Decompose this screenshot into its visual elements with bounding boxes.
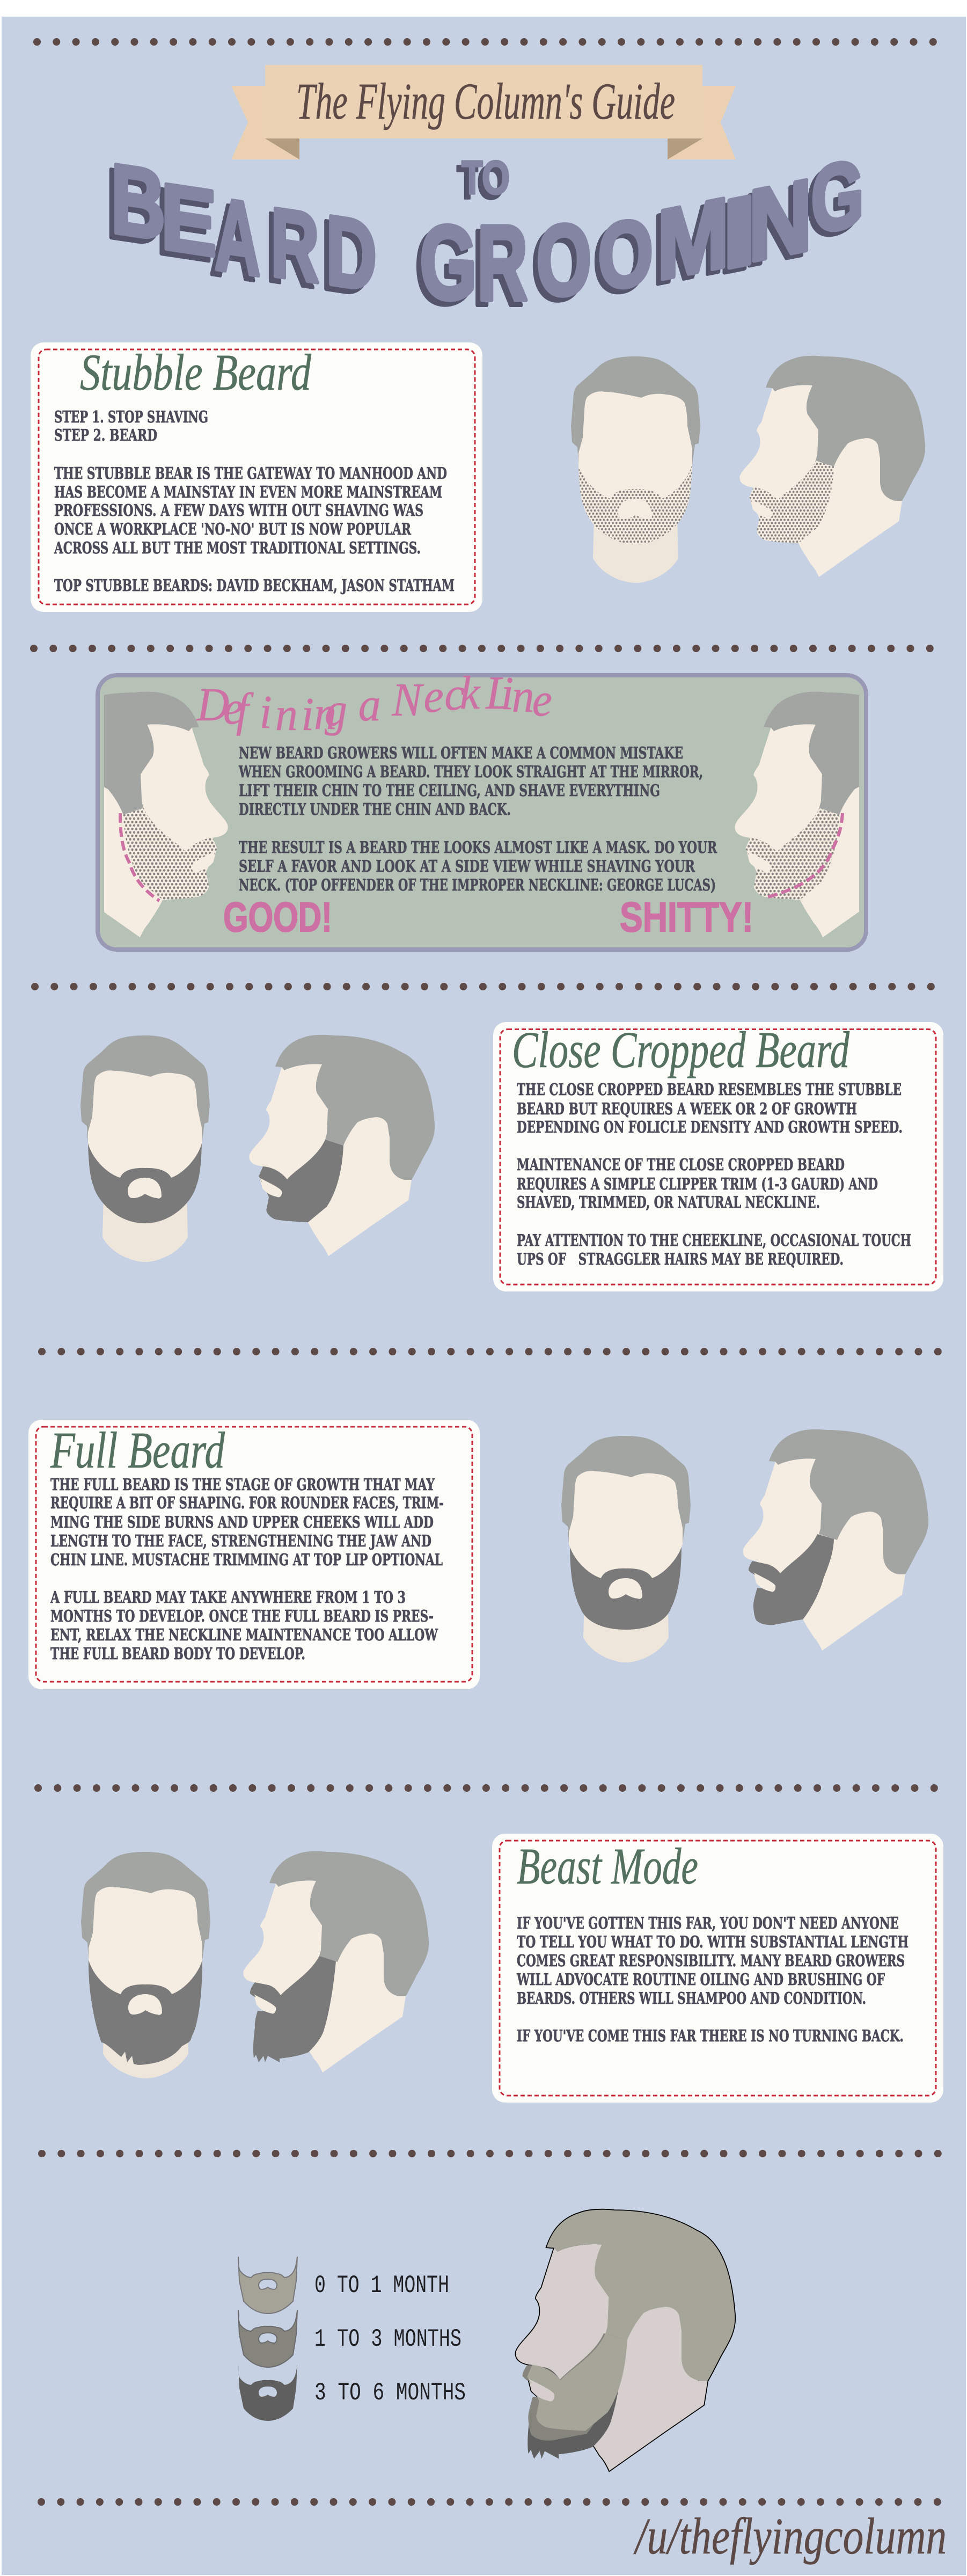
main title: to beard grooming: R — [477, 203, 528, 323]
main title: to beard grooming: T — [461, 152, 483, 204]
icon: beard 0 to 1 month — [238, 2257, 297, 2314]
body text: stubble beard: STEP 1. STOP SHAVING — [54, 408, 208, 427]
heading: stubble beard: Stubble Beard — [80, 344, 312, 401]
body text: neckline: THE RESULT IS A BEARD THE LOOKS ALMOST LIKE A MASK. DO YOUR — [239, 838, 717, 857]
main title: to beard grooming: B — [111, 143, 166, 261]
body text: close cropped beard: MAINTENANCE OF THE CLOSE CROPPED BEARD — [517, 1156, 845, 1174]
heading: defining a neckline: Defining a NeckLine — [196, 667, 552, 740]
illustration: close cropped beard front view — [80, 1035, 210, 1262]
main title: to beard grooming: A — [215, 176, 260, 298]
body text: full beard: MONTHS TO DEVELOP. ONCE THE FULL BEARD IS PRES- — [50, 1607, 434, 1626]
body text: full beard: LENGTH TO THE FACE, STRENGTHENING THE JAW AND — [50, 1532, 431, 1551]
body text: neckline: NEW BEARD GROWERS WILL OFTEN MAKE A COMMON MISTAKE — [239, 744, 683, 763]
body text: stubble beard: ACROSS ALL BUT THE MOST TRADITIONAL SETTINGS. — [54, 539, 421, 558]
dashed guide: bad neckline — [768, 813, 843, 897]
body text: stubble beard: STEP 2. BEARD — [54, 426, 157, 445]
body text: neckline: WHEN GROOMING A BEARD. THEY LOOK STRAIGHT AT THE MIRROR, — [238, 763, 703, 782]
body text: neckline: NECK. (TOP OFFENDER OF THE IMPROPER NECKLINE: GEORGE LUCAS) — [239, 876, 716, 895]
main title: to beard grooming: O — [482, 151, 510, 204]
legend label: 1 to 3 months: 1 TO 3 MONTHS — [314, 2325, 461, 2353]
label: shitty: SHITTY! — [620, 893, 753, 940]
main title: to beard grooming — [111, 140, 865, 323]
right profile: bad neckline — [735, 691, 859, 937]
illustration: stubble beard front view — [571, 356, 700, 583]
body text: stubble beard: THE STUBBLE BEAR IS THE GATEWAY TO MANHOOD AND — [54, 464, 447, 483]
main title: to beard grooming: N — [748, 157, 812, 284]
panel: close cropped beard — [493, 1021, 943, 1291]
panel: full beard — [28, 1420, 480, 1689]
body text: neckline: SELF A FAVOR AND LOOK AT A SIDE VIEW WHILE SHAVING YOUR — [239, 857, 695, 876]
left profile: good neckline — [104, 691, 228, 937]
icon: beard 3 to 6 months — [238, 2364, 297, 2421]
main title: to beard grooming: O — [536, 203, 591, 317]
label: good: GOOD! — [223, 893, 332, 940]
body text: neckline — [238, 744, 717, 895]
body text: neckline: DIRECTLY UNDER THE CHIN AND BACK. — [239, 800, 511, 819]
body text: close cropped beard: UPS OF STRAGGLER HAIRS MAY BE REQUIRED. — [517, 1250, 844, 1269]
body text: close cropped beard: SHAVED, TRIMMED, OR NATURAL NECKLINE. — [517, 1193, 820, 1212]
main title: to beard grooming: I — [721, 173, 758, 290]
legend: beard growth timeline — [238, 2257, 466, 2421]
body text: full beard: REQUIRE A BIT OF SHAPING. FOR ROUNDER FACES, TRIM- — [50, 1494, 444, 1513]
body text: stubble beard — [54, 408, 455, 595]
dashed guide: good neckline — [120, 813, 159, 901]
illustration: full beard front view — [561, 1436, 691, 1662]
legend label: 3 to 6 months: 3 TO 6 MONTHS — [314, 2379, 466, 2407]
heading: close cropped beard: Close Cropped Beard — [512, 1021, 850, 1078]
main title: to beard grooming: G — [811, 140, 865, 253]
illustration: stubble beard side view — [739, 356, 925, 577]
main title: to beard grooming: M — [657, 176, 729, 302]
body text: close cropped beard — [517, 1081, 911, 1269]
heading: beast mode: Beast Mode — [517, 1837, 698, 1895]
heading: full beard: Full Beard — [50, 1421, 225, 1479]
main title: to beard grooming: O — [598, 199, 653, 309]
body text: stubble beard: PROFESSIONS. A FEW DAYS WITH OUT SHAVING WAS — [54, 501, 423, 520]
body text: beast mode — [516, 1914, 909, 2046]
body text: stubble beard: TOP STUBBLE BEARDS: DAVID BECKHAM, JASON STATHAM — [54, 577, 455, 595]
illustration: beast mode side view — [243, 1851, 429, 2073]
panel: stubble beard — [31, 342, 482, 612]
panel: beast mode — [492, 1834, 943, 2103]
body text: full beard: THE FULL BEARD IS THE STAGE OF GROWTH THAT MAY — [50, 1476, 435, 1494]
ribbon banner with title line — [231, 65, 736, 159]
illustration: full beard side view — [743, 1429, 928, 1651]
body text: full beard — [50, 1476, 444, 1663]
main title: to beard grooming: G — [420, 202, 477, 323]
panel: defining a neckline — [96, 673, 868, 952]
body text: stubble beard: HAS BECOME A MAINSTAY IN EVEN MORE MAINSTREAM — [54, 483, 442, 502]
body text: full beard: THE FULL BEARD BODY TO DEVELOP. — [50, 1645, 305, 1663]
body text: full beard: A FULL BEARD MAY TAKE ANYWHERE FROM 1 TO 3 — [50, 1588, 406, 1607]
illustration: layered beard growth profile — [516, 2210, 735, 2471]
illustration: close cropped beard side view — [249, 1035, 435, 1256]
body text: full beard: MING THE SIDE BURNS AND UPPER CHEEKS WILL ADD — [50, 1513, 434, 1532]
main title: to beard grooming: E — [160, 163, 217, 276]
main title: to beard grooming: D — [326, 194, 377, 312]
body text: neckline: LIFT THEIR CHIN TO THE CEILING, AND SHAVE EVERYTHING — [239, 782, 660, 800]
body text: full beard: CHIN LINE. MUSTACHE TRIMMING AT TOP LIP OPTIONAL — [50, 1551, 443, 1570]
body text: stubble beard: ONCE A WORKPLACE 'NO-NO' BUT IS NOW POPULAR — [54, 520, 412, 539]
illustration: beast mode front view — [81, 1852, 210, 2078]
icon: beard 1 to 3 months — [238, 2310, 297, 2367]
main title: to beard grooming: R — [270, 187, 319, 304]
body text: full beard: ENT, RELAX THE NECKLINE MAINTENANCE TOO ALLOW — [50, 1626, 438, 1645]
banner text: The Flying Column's Guide — [296, 72, 675, 130]
legend label: 0 to 1 month: 0 TO 1 MONTH — [314, 2272, 449, 2300]
